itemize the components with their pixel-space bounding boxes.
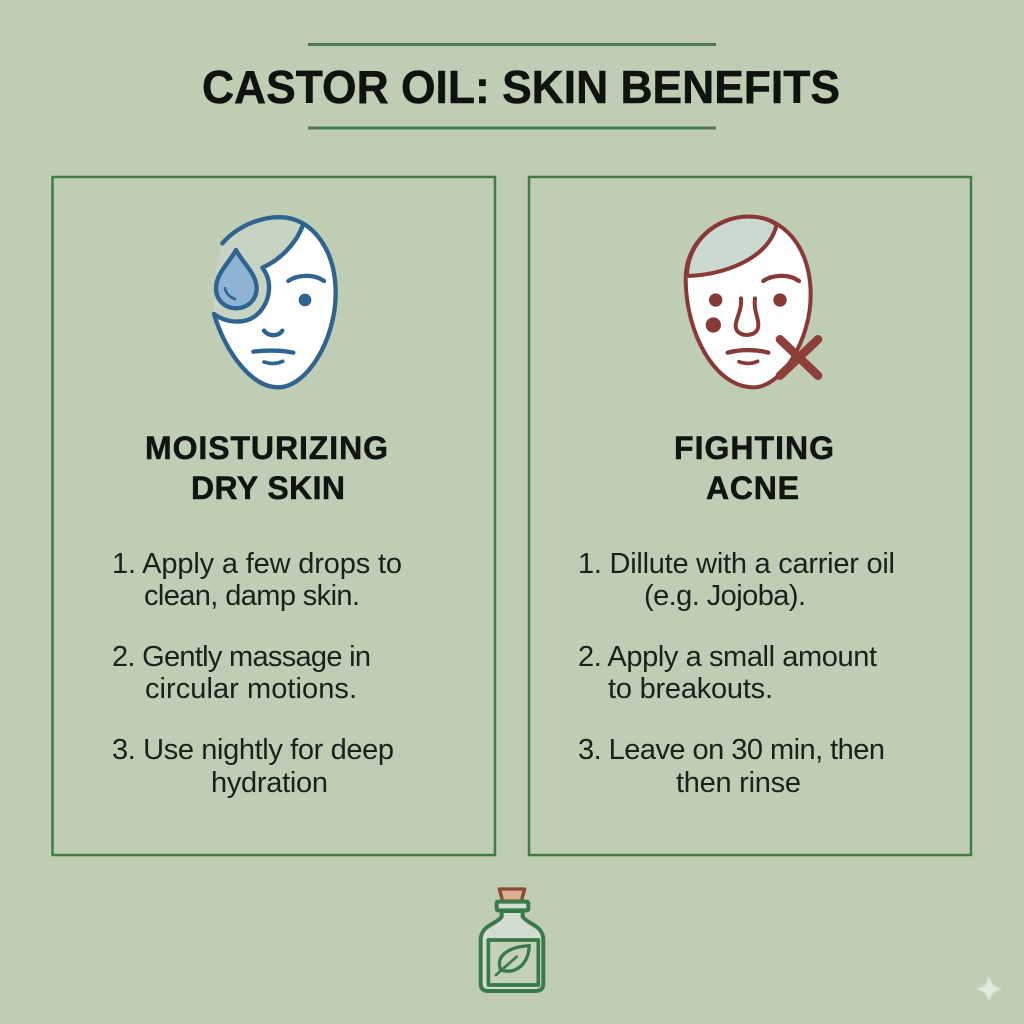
- steps: fighting acne: (e.g. Jojoba).: [644, 580, 806, 612]
- steps: moisturizing: [112, 548, 402, 799]
- icon: oil bottle with leaf: [481, 889, 543, 991]
- steps: fighting acne: then rinse: [676, 767, 801, 799]
- panel: fighting acne: [529, 177, 971, 855]
- steps: moisturizing: 3. Use nightly for deep: [112, 734, 394, 766]
- heading: fighting acne: [674, 430, 834, 506]
- steps: fighting acne: 3. Leave on 30 min, then: [578, 734, 885, 766]
- heading: moisturizing dry skin: [145, 430, 388, 506]
- heading: moisturizing dry skin: MOISTURIZING: [145, 430, 388, 466]
- steps: moisturizing: hydration: [211, 767, 328, 799]
- steps: fighting acne: [578, 548, 895, 799]
- steps: moisturizing: clean, damp skin.: [144, 580, 360, 612]
- steps: fighting acne: 2. Apply a small amount: [578, 641, 877, 673]
- steps: moisturizing: circular motions.: [145, 673, 357, 705]
- heading: fighting acne: FIGHTING: [674, 430, 834, 466]
- icon: sparkle: [978, 978, 1000, 1000]
- steps: fighting acne: to breakouts.: [608, 673, 773, 705]
- heading: moisturizing dry skin: DRY SKIN: [191, 470, 345, 506]
- steps: moisturizing: 1. Apply a few drops to: [112, 548, 402, 580]
- heading: fighting acne: ACNE: [706, 470, 799, 506]
- title: CASTOR OIL: SKIN BENEFITS: [202, 61, 840, 113]
- icon: face with acne and cross: [686, 217, 818, 387]
- icon: face with water drop: [214, 217, 336, 387]
- panel: moisturizing dry skin: [52, 177, 495, 855]
- steps: fighting acne: 1. Dillute with a carrier oil: [578, 548, 895, 580]
- steps: moisturizing: 2. Gently massage in: [112, 641, 371, 673]
